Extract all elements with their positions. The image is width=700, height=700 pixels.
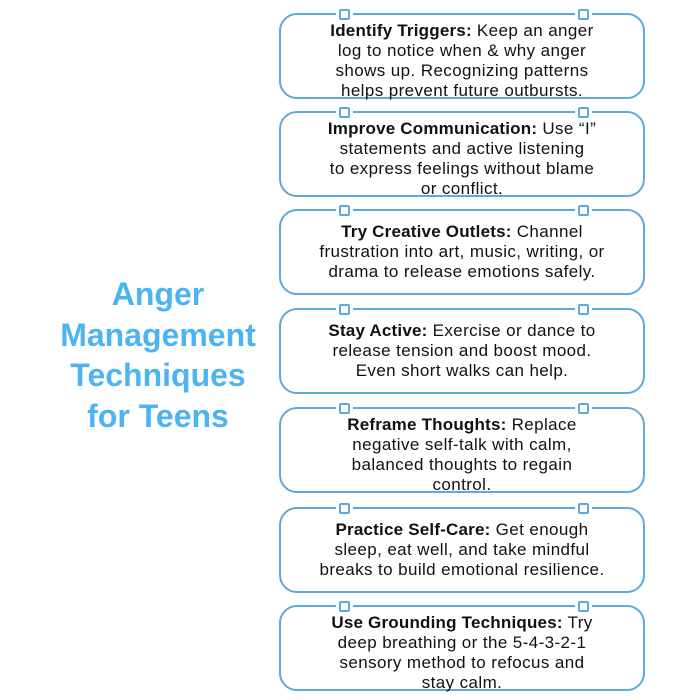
card: stay active: Even short walks can help. <box>356 361 568 380</box>
title <box>60 276 256 434</box>
card: reframe thoughts: control. <box>433 475 491 494</box>
card: grounding: deep breathing or the 5-4-3-2-1 <box>338 633 586 652</box>
card: self-care: breaks to build emotional resilience. <box>319 560 605 579</box>
card: stay active <box>279 308 645 394</box>
card: creative outlets: Try Creative Outlets: Channel <box>341 222 583 241</box>
title: for Teens <box>87 398 229 434</box>
card: grounding: sensory method to refocus and <box>339 653 584 672</box>
card: reframe thoughts <box>279 407 645 493</box>
card: improve communication: Improve Communication: Use “I” <box>328 119 596 138</box>
card: self-care: sleep, eat well, and take mindful <box>334 540 590 559</box>
card: improve communication: to express feelings without blame <box>330 159 594 178</box>
card: stay active: release tension and boost mood. <box>332 341 592 360</box>
card: stay active: Stay Active: Exercise or dance to <box>328 321 596 340</box>
card: grounding: stay calm. <box>422 673 502 692</box>
card: identify triggers: Identify Triggers: Keep an anger <box>330 21 594 40</box>
card: self-care: Practice Self-Care: Get enough <box>336 520 588 539</box>
card: reframe thoughts: Reframe Thoughts: Replace <box>347 415 577 434</box>
card: identify triggers: shows up. Recognizing patterns <box>336 61 588 80</box>
card: creative outlets: drama to release emotions safely. <box>328 262 596 281</box>
card: self-care <box>279 507 645 593</box>
card: creative outlets: frustration into art, music, writing, or <box>319 242 605 261</box>
card: grounding <box>279 605 645 691</box>
card: grounding: Use Grounding Techniques: Try <box>331 613 593 632</box>
card: identify triggers: log to notice when & why anger <box>338 41 586 60</box>
title: Anger <box>112 276 204 312</box>
title: Techniques <box>70 357 246 393</box>
card: identify triggers <box>279 13 645 99</box>
title: Management <box>60 316 256 352</box>
card: improve communication: or conflict. <box>421 179 503 198</box>
card: identify triggers: helps prevent future outbursts. <box>341 81 583 100</box>
card: reframe thoughts: negative self-talk with calm, <box>352 435 572 454</box>
card: creative outlets <box>279 209 645 295</box>
card: improve communication <box>279 111 645 197</box>
card: improve communication: statements and active listening <box>340 139 584 158</box>
card: reframe thoughts: balanced thoughts to regain <box>352 455 572 474</box>
